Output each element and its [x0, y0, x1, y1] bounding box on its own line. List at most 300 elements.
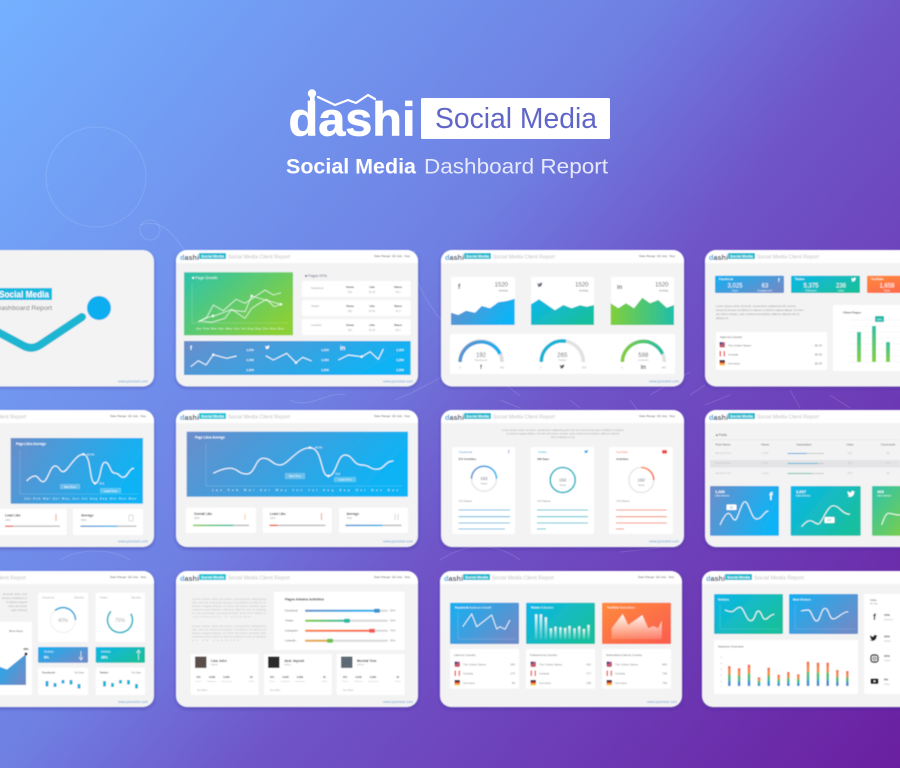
sessions overview stacked bars: 30	[720, 675, 723, 677]
pages KPIs table: Views	[346, 285, 354, 289]
pages activities bars panel: 90%	[390, 609, 396, 613]
header	[440, 571, 682, 584]
posts table: Association	[796, 442, 812, 446]
slide 1: cover	[0, 250, 154, 388]
facebook column: 272 Activities	[458, 457, 477, 461]
header: Date Range: Q3 July - Sep	[374, 254, 410, 258]
profile card: Mechal Tom: Admin	[357, 664, 364, 666]
youtube KPI box: Subs	[884, 288, 891, 292]
pages KPIs table: ■ Pages KPIs	[305, 274, 327, 278]
subscribers by country panel: 758	[662, 681, 667, 685]
slide 8: posts table and cards	[705, 410, 900, 548]
slide 7: channel donut columns	[441, 410, 684, 548]
pages KPIs table: 36.5K	[369, 290, 376, 294]
facebook column: Facebook	[459, 450, 473, 454]
linkedin post card	[872, 486, 900, 536]
twitter KPI box: 236	[836, 284, 847, 290]
pages KPIs table: 40.3	[395, 309, 401, 313]
intro text: Lorem ipsum dolor sit amet, consectetur adipiscing elit, sed do eiusmod tempor incididunt ut labore	[502, 428, 625, 432]
pages KPIs table: Views	[346, 323, 354, 327]
paragraph: aliquip ex.	[716, 316, 729, 320]
likes by country panel: The United States	[463, 662, 487, 666]
header	[441, 410, 684, 423]
profile card: Mechal Tom: 541	[343, 675, 348, 679]
posts table: 50	[886, 461, 890, 465]
client pages bar chart: 54%	[877, 317, 883, 321]
profile card: Mechal Tom	[337, 654, 405, 695]
activity up box: Activity	[101, 650, 111, 654]
posts table: 1,542	[762, 461, 769, 465]
posts table: 50	[886, 471, 890, 475]
subscribers by country panel: 758	[662, 672, 667, 676]
facebook donut panel: Monthly	[74, 596, 85, 600]
header: dashi	[180, 574, 199, 583]
cover badge: Social Media	[0, 290, 50, 300]
profile card: Mechal Tom: 91	[397, 675, 400, 679]
subscribers by country panel: Germany	[615, 681, 627, 685]
youtube KPI box	[867, 276, 900, 293]
blue sparkline band: 1,256	[321, 368, 329, 372]
profile card: Mechal Tom: 2,001	[370, 675, 377, 679]
header	[0, 571, 154, 584]
line chart panel: 80.4%	[87, 452, 95, 456]
linkedin gauge: 598	[638, 353, 649, 359]
twitter donut panel: Monthly	[131, 596, 142, 600]
footer url: www.yourweb.com	[118, 380, 148, 384]
facebook area card: 1520	[495, 282, 509, 288]
blue sparkline band: f	[190, 346, 193, 352]
intro text	[502, 428, 625, 439]
footer url: www.yourweb.com	[383, 380, 413, 384]
sessions overview stacked bars: 0	[720, 686, 722, 688]
paragraph: enim ad minim	[8, 604, 28, 608]
new visitors line chart	[789, 594, 858, 634]
activity down box: Activity	[44, 650, 54, 654]
twitter post card: 1,607	[796, 489, 807, 494]
header: dashi	[180, 253, 199, 262]
linkedin gauge: in	[641, 365, 646, 371]
youtube column: YouTube	[616, 450, 628, 454]
pages KPIs table: Facebook	[311, 286, 324, 290]
profile card: Lisa John: 541	[196, 675, 201, 679]
new visitors line chart: New Visitors	[793, 598, 811, 602]
posts table: Post Name	[716, 442, 731, 446]
profile card: Mechal Tom: 4,642	[355, 675, 362, 679]
twitter share	[870, 634, 892, 643]
overall like panel: 40%	[194, 516, 200, 520]
slide 11: audience charts by country	[440, 571, 682, 708]
twitter area card	[531, 277, 594, 325]
facebook donut panel: 40%	[58, 618, 69, 624]
facebook mini bars panel: No Date	[74, 670, 85, 674]
paragraphs: nostrud exercitation ullamco laboris nisi ut aliquip	[192, 608, 266, 612]
pages KPIs table: 90.3	[395, 290, 401, 294]
instagram share: Tablet	[884, 660, 891, 662]
green line chart panel: Jan Feb Mar Apr May Jun Jul Aug Sep Oct Nov Dec	[196, 326, 285, 330]
subscribers by country panel: Canada	[615, 672, 626, 676]
posts table: Sample Post	[715, 451, 731, 455]
facebook share: Desktop	[884, 618, 893, 622]
instagram share	[871, 654, 891, 662]
profile card: Mechal Tom: Comments	[368, 680, 379, 683]
linkedin gauge: 0	[621, 366, 623, 370]
posts table: Likes	[846, 442, 854, 446]
pages KPIs table: Twitter	[311, 304, 319, 308]
facebook post card: 85	[730, 506, 733, 509]
average panel: 70%	[346, 516, 353, 520]
blue sparkline band: 1,256	[246, 358, 254, 362]
profile card: Jack Jaycob: See More	[270, 689, 281, 692]
linkedin gauge: LinkedIn	[638, 358, 649, 362]
instagram share: 20%	[884, 654, 890, 658]
facebook mini bars panel: Facebook	[42, 670, 56, 674]
facebook share: 33%	[884, 613, 890, 617]
facebook KPI box: Engagement	[758, 288, 773, 292]
subscribers by country panel: Subscribers Like by Country	[606, 653, 643, 657]
profile card: Lisa John: 2,001	[223, 675, 230, 679]
sessions overview stacked bars: 10	[720, 681, 723, 683]
paragraphs: nostrud exercitation ullamco laboris nisi ut aliquip	[192, 634, 266, 638]
subtitle: Dashboard Report	[424, 156, 608, 178]
header	[705, 250, 900, 263]
header: Date Range: Q3 July - Sep	[638, 575, 674, 579]
twitter mini bars panel: Twitter	[100, 670, 109, 674]
header: Date Range: Q3 July - Sep	[110, 575, 146, 579]
pages KPIs table: 962	[348, 290, 353, 294]
blue sparkline band: 1,256	[321, 358, 329, 362]
blue sparkline band: 1,256	[396, 368, 404, 372]
youtube share: Other	[884, 683, 890, 686]
country rows: $5.35	[815, 352, 822, 356]
paragraph: eiusmod tempor incididunt ut labore et dolore magna aliqua. Ut enim	[716, 308, 804, 312]
linkedin area card: 1520	[655, 282, 669, 288]
header	[176, 250, 418, 263]
pages activities bars panel: Instagram	[285, 629, 298, 633]
subscribers by country panel: 680	[662, 662, 667, 666]
header: Social Media	[201, 576, 225, 580]
header: dashi	[445, 253, 464, 262]
channel views panel	[864, 594, 900, 694]
twitter KPI box: Followers	[805, 288, 817, 292]
header: Social Media	[730, 255, 754, 259]
visitors line chart	[714, 594, 783, 634]
background decorative circles and curves	[46, 127, 850, 560]
linkedin gauge: 800	[662, 366, 667, 370]
paragraphs: ex ea commodo.	[192, 638, 242, 642]
facebook column	[452, 447, 515, 534]
youtube column	[609, 447, 673, 534]
pages KPIs table: Like	[369, 285, 375, 289]
posts table: Sample Post	[715, 471, 731, 475]
linkedin area card: in	[617, 285, 623, 291]
twitter gauge: 500	[582, 366, 587, 370]
facebook area card: f	[458, 284, 461, 291]
profile card: Lisa John: Admin	[211, 664, 218, 666]
header: Social Media Report	[754, 576, 805, 582]
paragraphs: Lorem ipsum dolor sit amet, consectetur adipiscing	[192, 597, 266, 601]
cover line icon	[0, 296, 111, 348]
line chart panel: Page Likes Average	[195, 436, 225, 440]
twitter gauge: 0	[540, 366, 542, 370]
twitter column: 170 Visitors	[537, 499, 551, 503]
posts table: Comments	[881, 442, 896, 446]
profile card: Mechal Tom: Followers	[354, 680, 364, 683]
header: Social Media	[727, 576, 751, 580]
linkedin post card: 468	[877, 489, 884, 494]
profile card: Jack Jaycob: Posts	[269, 680, 276, 683]
profile card: Lisa John	[191, 654, 259, 695]
least like panel: Least Like	[270, 512, 286, 516]
blue sparkline band: 1,256	[396, 358, 404, 362]
blue sparkline band: 1,256	[321, 348, 329, 352]
twitter post card: 347	[827, 519, 832, 522]
facebook KPI box: f	[778, 278, 780, 284]
least like panel	[0, 509, 67, 535]
paragraphs: ex ea commodo consequat duis aute irure dolor in	[192, 611, 266, 615]
paragraph: tempor incididunt ut	[2, 596, 27, 600]
least like panel	[263, 508, 332, 533]
likes by country panel: Likes by Country	[454, 653, 476, 657]
followers by country panel: The United States	[539, 662, 563, 666]
facebook donut panel: Facebook	[42, 596, 55, 600]
facebook line chart: Facebook Audience Growth	[455, 606, 492, 610]
paragraphs: elit, sed do eiusmod tempor incididunt ut labore et	[192, 628, 266, 632]
posts table: 500	[848, 461, 853, 465]
followers by country panel: 198	[586, 681, 591, 685]
twitter share: Mobile	[884, 640, 892, 643]
facebook KPI box: 63	[762, 284, 769, 290]
line chart panel: Page Likes Average	[16, 442, 46, 446]
slide 12: visitors and channel views	[702, 571, 900, 708]
header: Date Range: Q3 July - Sep	[639, 254, 675, 258]
area chart panel	[0, 622, 32, 695]
pages activities bars panel: 75%	[390, 629, 396, 633]
sessions overview stacked bars: 60	[720, 663, 723, 665]
profile card: Jack Jaycob: Admin	[284, 664, 291, 666]
footer url: www.yourweb.com	[118, 700, 148, 704]
pages KPIs table: 962	[348, 309, 353, 313]
likes by country panel: Canada	[463, 672, 474, 676]
line chart panel: Jan Feb Mar Apr May Jun Jul Aug Sep Oct Nov Dec	[212, 488, 399, 492]
country rows: The United States	[728, 344, 752, 348]
youtube share: 8%	[884, 678, 889, 682]
footer url: www.yourweb.com	[647, 700, 677, 704]
facebook KPI box: 3,025	[727, 284, 743, 290]
twitter area card: 1520	[575, 282, 589, 288]
likes by country panel: 280	[510, 662, 515, 666]
twitter KPI box: 5,375	[803, 284, 819, 290]
followers by country panel: 432	[586, 662, 591, 666]
blue sparkline band: 1,256	[396, 348, 404, 352]
least like panel: 16%	[270, 516, 276, 520]
youtube KPI box: YouTube	[871, 277, 884, 281]
facebook KPI box: Facebook	[719, 277, 733, 281]
header: Social Media Client Report	[228, 255, 291, 261]
followers by country panel: Followers by Country	[530, 653, 558, 657]
facebook donut panel	[38, 593, 88, 642]
header: Social Media	[201, 415, 225, 419]
country rows: $5.35	[815, 362, 822, 366]
header	[702, 571, 900, 584]
facebook line chart	[450, 603, 519, 644]
pages KPIs table: LinkedIn	[311, 323, 322, 327]
likes by country panel: 98	[512, 681, 515, 685]
header: Date Range: Q3 July - Sep	[110, 414, 146, 418]
pages KPIs table: 962	[348, 328, 353, 332]
profile card: Lisa John: See More	[197, 689, 208, 692]
profile card: Mechal Tom: Posts	[342, 680, 349, 683]
client pages bar chart	[833, 305, 900, 371]
activity up box: 28%	[101, 656, 108, 660]
likes by country panel	[450, 649, 519, 689]
average panel	[339, 508, 408, 533]
line chart panel	[11, 438, 143, 504]
country rows	[720, 342, 822, 366]
profile card: Lisa John: Followers	[207, 680, 218, 683]
followers by country panel	[526, 649, 595, 689]
logo: dashi wordmark: dashi	[288, 92, 416, 146]
pages KPIs table: Share	[394, 285, 402, 289]
paragraph: quis nostrud	[11, 608, 27, 612]
average panel: Average	[81, 514, 94, 518]
paragraphs: dolore magna aliqua. Ut enim ad minim veniam quis	[192, 604, 267, 608]
youtube share	[870, 678, 890, 686]
followers by country panel: Canada	[539, 672, 550, 676]
least like panel: 16%	[5, 518, 11, 522]
facebook share	[873, 612, 893, 622]
profile card: Jack Jaycob	[264, 654, 332, 695]
average panel: Average	[346, 512, 359, 516]
footer url: www.yourweb.com	[118, 540, 148, 544]
profile card: Jack Jaycob: Rank	[322, 681, 328, 683]
green line chart panel: ■ Page Growth	[192, 276, 218, 280]
posts table: 50	[886, 451, 890, 455]
youtube column: 192	[638, 478, 646, 482]
twitter KPI box: Twitter	[795, 277, 805, 281]
age by country panel: Ages by Country	[720, 335, 743, 339]
pages activities bars panel: Facebook	[285, 609, 298, 613]
line chart panel: Least Time	[104, 489, 117, 493]
area chart panel: 98%	[23, 647, 29, 651]
posts table: Sample Post	[715, 461, 731, 465]
client pages bar chart: Client Pages	[843, 310, 861, 314]
slide 4: accounts and client pages	[705, 250, 900, 388]
twitter bar chart: Twitter Followers	[531, 606, 554, 610]
pages activities bars panel: 54%	[390, 619, 396, 623]
header: dashi	[709, 413, 728, 422]
header: Social Media Client Report	[492, 576, 555, 582]
facebook KPI box: Likes	[732, 288, 739, 292]
header: Social Media	[201, 255, 225, 259]
twitter area card: Activity	[579, 288, 589, 292]
country rows: Canada	[728, 352, 739, 356]
twitter donut panel: Twitter	[100, 596, 108, 600]
posts table: 1,542	[762, 451, 769, 455]
footer url: www.yourweb.com	[649, 540, 679, 544]
pages activities bars panel: Pages Admins Activities	[285, 598, 324, 602]
header: Social Media Client Report	[493, 255, 556, 261]
line chart panel: Best Time	[289, 474, 301, 478]
twitter post card	[791, 486, 861, 536]
header: Social Media Client Report	[493, 415, 556, 421]
posts table: 500	[848, 451, 853, 455]
header: Social Media	[465, 576, 489, 580]
twitter column: 196 Days	[537, 457, 550, 461]
youtube area chart: YouTube Subscribers	[607, 606, 636, 610]
profile card: Jack Jaycob: Followers	[281, 680, 291, 683]
overall like panel: Overall Like	[194, 512, 212, 516]
facebook area card	[451, 277, 515, 325]
facebook KPI box	[715, 276, 784, 293]
paragraphs: dolore magna aliqua. Ut enim ad minim veniam quis	[192, 631, 267, 635]
twitter bar chart	[526, 603, 595, 644]
channel views panel: Visits	[870, 598, 877, 602]
slide 5: page likes average (cropped)	[0, 410, 154, 548]
profile card: Jack Jaycob: 91	[323, 675, 326, 679]
twitter mini bars panel	[96, 668, 145, 695]
facebook column: 174 Visitors	[458, 499, 473, 503]
least like panel: Least Like	[5, 514, 21, 518]
profile card: Mechal Tom: See More	[343, 689, 354, 692]
sessions overview stacked bars: 70	[720, 657, 723, 659]
profile card: Jack Jaycob: 541	[270, 675, 275, 679]
pages KPIs table: Views	[346, 304, 354, 308]
blue sparkline band: in	[340, 346, 346, 352]
facebook post card: Likes Service	[715, 494, 730, 498]
posts table: ■ Posts	[716, 433, 727, 437]
slide 3: activity areas and gauges	[441, 250, 684, 388]
pages KPIs table: Like	[369, 304, 375, 308]
header: dashi	[709, 253, 728, 262]
intro text: nisi ut aliquip ex ea.	[551, 435, 575, 439]
youtube KPI box: 1,658	[879, 284, 895, 290]
facebook gauge: Facebook	[475, 358, 488, 362]
footer url: www.yourweb.com	[383, 700, 413, 704]
likes by country panel: Germany	[463, 681, 475, 685]
intro text: et dolore magna aliqua. Ut enim ad minim veniam, quis nostrud exercitation ullamco laboris	[507, 432, 620, 436]
twitter column: Twitter	[538, 450, 547, 454]
activity up box	[96, 647, 145, 663]
paragraph: Lorem ipsum dolor sit amet, consectetur adipiscing elit, sed do	[716, 304, 796, 308]
country rows: $5.35	[815, 344, 822, 348]
line chart panel: Jan Feb Mar Apr May Jun Jul Aug Sep Oct Nov Dec	[24, 496, 137, 500]
twitter column: Views	[559, 484, 567, 487]
average panel: 55%	[81, 518, 87, 522]
likes by country panel: 170	[510, 672, 515, 676]
line chart panel: 70.5	[335, 472, 341, 476]
blue sparkline band	[184, 341, 411, 375]
pages KPIs table: Like	[369, 323, 375, 327]
activity down box: 8%	[44, 656, 49, 660]
age by country panel	[716, 332, 827, 370]
pages activities bars panel: 30%	[390, 639, 396, 643]
subscribers by country panel: The United States	[615, 662, 639, 666]
youtube area chart	[602, 603, 671, 644]
header: Date Range: Q3 July - Sep	[639, 414, 675, 418]
twitter KPI box	[791, 276, 860, 293]
country rows: Germany	[728, 362, 740, 366]
facebook column: 192	[480, 476, 488, 481]
facebook gauge	[459, 341, 505, 371]
profile card: Lisa John: Posts	[196, 680, 202, 683]
facebook column: Views	[481, 482, 488, 486]
facebook gauge: f	[480, 365, 483, 371]
youtube column: Views	[638, 484, 645, 487]
header: Social Media	[466, 255, 490, 259]
header	[705, 410, 900, 423]
posts table	[710, 433, 900, 475]
pages activities bars panel: Twitter	[285, 619, 294, 623]
